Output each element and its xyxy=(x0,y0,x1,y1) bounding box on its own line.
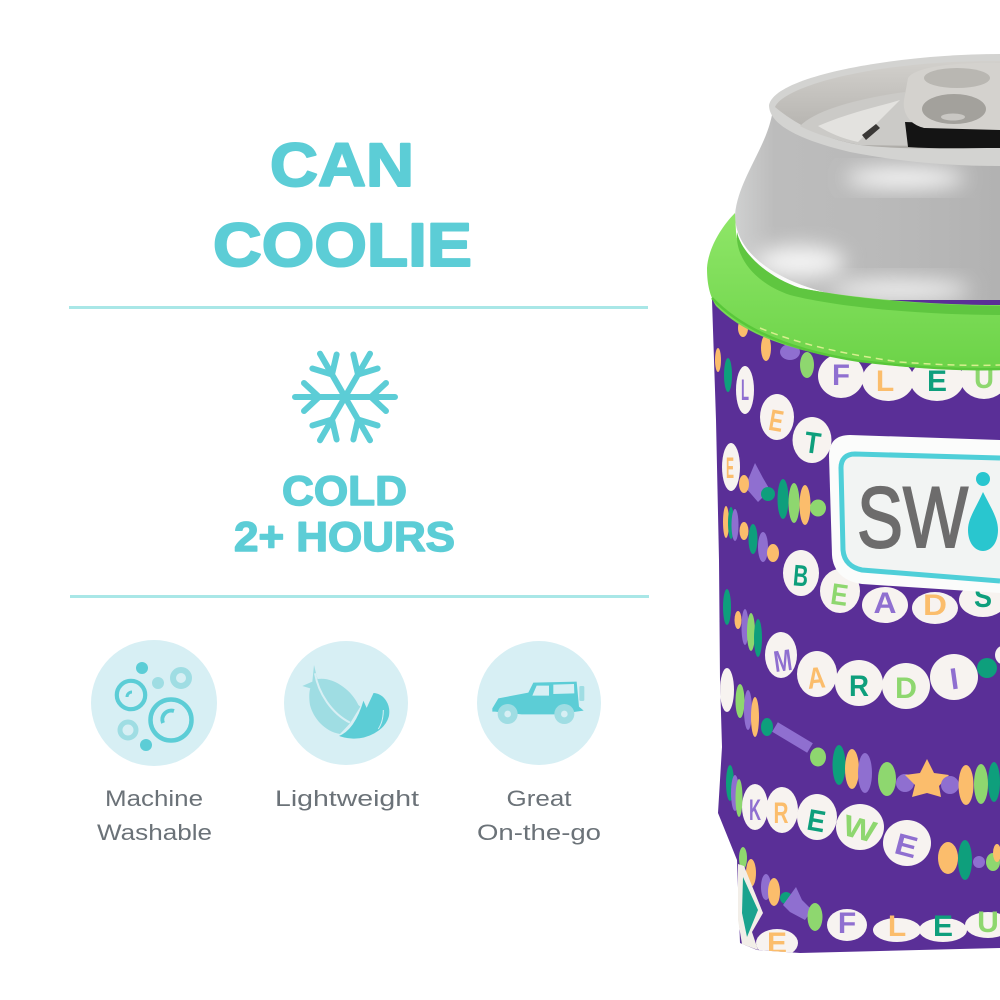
label: Machine xyxy=(105,786,203,811)
bead strand: mardi: M xyxy=(772,644,794,679)
label: Great xyxy=(506,786,572,811)
bead strand: let: T xyxy=(802,426,823,461)
bead strand: fleur top xyxy=(715,319,1000,401)
side fold xyxy=(738,864,763,950)
product: purple coolie sleeve xyxy=(700,213,1000,960)
bead strand: beads: B xyxy=(792,559,810,594)
bead strand: beads: A xyxy=(874,587,896,620)
bead strand: let: E xyxy=(726,452,734,485)
bead strand: fleur bottom: U xyxy=(977,906,999,939)
icon: snowflake xyxy=(295,347,395,447)
title: COOLIE xyxy=(213,211,472,279)
cold duration heading xyxy=(234,467,455,560)
bead strand: fleur top: E xyxy=(927,365,947,398)
bead strand: let: L xyxy=(741,374,749,407)
bead strand: fleur bottom: E xyxy=(933,910,953,943)
label xyxy=(97,786,212,845)
green collar xyxy=(707,213,1000,370)
bead strand: let xyxy=(722,366,832,525)
icon: feather xyxy=(302,665,390,739)
label: Washable xyxy=(97,820,212,845)
bead strand: beads xyxy=(723,506,1000,624)
bead strand: mardi xyxy=(723,589,1000,709)
logo patch xyxy=(829,435,1000,593)
opening under tab xyxy=(905,122,1000,148)
bead strand: krewe: E xyxy=(891,828,921,865)
bead strand: beads: S xyxy=(974,581,992,614)
bead strand: fleur top: U xyxy=(974,362,994,395)
label: Lightweight xyxy=(275,786,420,811)
sleeve body xyxy=(700,300,1000,960)
product: aluminium can xyxy=(735,54,1000,310)
feature: great on-the-go xyxy=(477,641,601,845)
icon: bubbles xyxy=(117,662,192,751)
feature: machine washable xyxy=(91,640,217,845)
bead strand: beads: D xyxy=(923,589,947,622)
can rim lip xyxy=(769,54,1000,166)
bead strand: star xyxy=(720,668,1000,805)
bead strand: beads: E xyxy=(829,578,850,613)
title: CAN xyxy=(270,131,414,199)
bead strand: let: E xyxy=(766,404,786,439)
label: On-the-go xyxy=(477,820,601,845)
can inner wall xyxy=(775,61,1000,148)
title xyxy=(213,131,472,279)
bead strand: krewe: K xyxy=(749,794,761,827)
feature: lightweight xyxy=(275,641,420,811)
bead strand: krewe xyxy=(726,765,1000,880)
bead strand: fleur bottom: E xyxy=(767,927,787,960)
pull tab xyxy=(904,63,1000,130)
bead strand: mardi: R xyxy=(849,670,869,703)
bead strand: krewe: R xyxy=(774,797,789,830)
logo text: SW xyxy=(857,470,968,566)
can lid xyxy=(800,92,925,146)
bead strand: mardi: I xyxy=(948,663,961,696)
logo drop xyxy=(968,472,998,551)
cold duration heading: COLD xyxy=(282,467,407,514)
bead strand: fleur bottom: F xyxy=(838,907,856,940)
bead strand: fleur bottom: L xyxy=(888,910,906,943)
label xyxy=(477,786,601,845)
bead strand: krewe: W xyxy=(839,809,880,850)
bead strand: mardi: A xyxy=(806,661,827,696)
cold duration heading: 2+ HOURS xyxy=(234,513,455,560)
bead strand: fleur top: L xyxy=(876,365,894,398)
can shoulder xyxy=(735,115,1000,310)
bead strand: fleur bottom xyxy=(739,847,1000,960)
bead strand: krewe: E xyxy=(804,804,828,839)
icon: jeep xyxy=(492,682,584,724)
bead strand: mardi: D xyxy=(895,672,917,705)
bead strand: fleur top: F xyxy=(832,359,850,392)
